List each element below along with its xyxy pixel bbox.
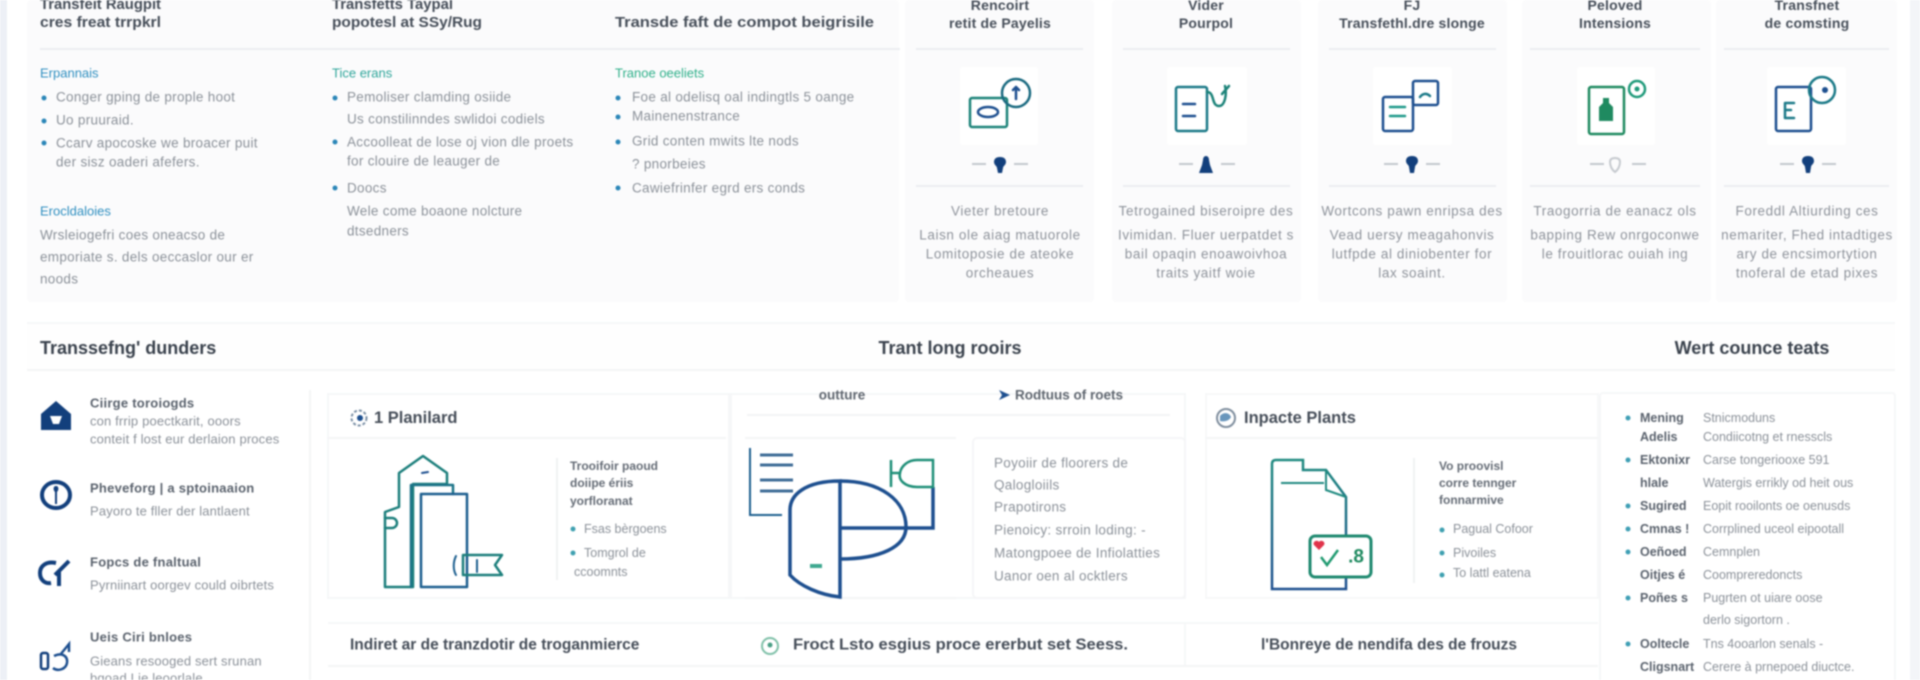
card 4 text: le frouitlorac ouiah ing — [1542, 246, 1688, 262]
list labels: Sugired — [1640, 499, 1687, 513]
card 5 text: Foreddl Altiurding ces — [1735, 204, 1879, 218]
card 4 text — [1530, 204, 1700, 262]
card 2 heading — [1179, 0, 1233, 31]
icon: card 4 marker — [1590, 158, 1646, 172]
heading: centre: Trant long rooirs — [878, 338, 1022, 358]
column 3 list — [615, 66, 854, 196]
feature 1 text: conteit f lost eur derlaion proces — [90, 432, 280, 446]
column 2 list: Tice erans — [332, 66, 393, 80]
panel text: Tomgrol de — [584, 546, 646, 560]
panel text: corre tennger — [1439, 476, 1517, 490]
bullets — [1626, 416, 1630, 646]
card 3 text: lax soaint. — [1378, 266, 1446, 280]
list labels — [1640, 411, 1695, 674]
column 3 list: Mainenenstrance — [632, 108, 740, 124]
panel: card 3 — [1318, 0, 1507, 302]
list labels: hlale — [1640, 476, 1669, 490]
icon: ring — [42, 482, 70, 508]
column 2 list: dtsedners — [347, 224, 409, 238]
panel text: Pivoiles — [1453, 546, 1496, 560]
column 1 list — [40, 66, 258, 170]
panel text — [570, 459, 667, 579]
feature 4 text: Gieans resooged sert srunan — [90, 654, 262, 668]
feature 1 text: con frrip poectkarit, ooors — [90, 414, 241, 428]
card 5 text: nemariter, Fhed intadtiges — [1721, 228, 1893, 242]
list labels: Cmnas ! — [1640, 522, 1689, 536]
column 3 list: Cawiefrinfer egrd ers conds — [632, 180, 805, 196]
section header band — [27, 322, 1895, 371]
list labels: Ektonixr — [1640, 453, 1690, 467]
outline list: Matongpoee de Infiolatties — [994, 546, 1160, 560]
card 2 text: Ivimidan. Fluer uerpatdet s — [1118, 228, 1294, 242]
panel text — [1439, 459, 1533, 580]
list labels: Mening — [1640, 411, 1684, 425]
column 1 list: Conger gping de prople hoot — [56, 90, 235, 104]
card 3 heading: Transfethl.dre slonge — [1339, 15, 1485, 31]
card 1 text: Vieter bretoure — [951, 204, 1049, 218]
card 5 text: tnoferal de etad pixes — [1736, 266, 1878, 280]
outline list — [994, 456, 1160, 584]
card 1 text: Laisn ole aiag matuorole — [919, 228, 1081, 242]
column 1 note: Wrsleiogefri coes oneacso de — [40, 228, 225, 242]
list labels: Oeñoed — [1640, 545, 1687, 559]
list labels: Cligsnart — [1640, 660, 1695, 674]
card 4 heading: Intensions — [1579, 15, 1651, 31]
column 1 list: der sisz oaderi afefers. — [56, 154, 200, 170]
list descriptions: Carse tongeriooxe 591 — [1703, 453, 1830, 467]
panel text: Pagual Cofoor — [1453, 522, 1533, 536]
feature 3 text: Pyrniinart oorgev could oibrtets — [90, 578, 274, 592]
panel text: Fsas bèrgoens — [584, 522, 667, 536]
feature 4 text — [90, 630, 262, 680]
column 2 list: Accoolleat de lose oj vion dle proets — [347, 134, 573, 150]
column 2 list: Us constilinndes swlidoi codiels — [347, 112, 545, 126]
list labels: Ooltecle — [1640, 637, 1689, 651]
panel title: 1 Planilard — [374, 409, 457, 427]
outline list: Pienoicy: srroin loding: - — [994, 522, 1146, 538]
bottom banner — [328, 622, 1598, 667]
column 3 list: Tranoe oeeliets — [615, 66, 705, 80]
panel: transfer comparison columns — [27, 0, 900, 302]
card 1 text — [919, 204, 1081, 280]
icon: card 5 document and dial — [1767, 67, 1846, 145]
tab title: Rodtuus of roets: Rodtuus of roets — [1015, 388, 1123, 402]
list descriptions: Eopit rooilonts oe oenusds — [1703, 499, 1850, 513]
column 3 list: Grid conten mwits lte nods — [632, 134, 799, 148]
icon: house — [41, 401, 71, 430]
icon: globe — [1217, 409, 1235, 427]
outline list: Uanor oen al ocktlers — [994, 568, 1128, 584]
illustration: document with check badge — [1272, 460, 1371, 589]
panel text: To lattl eatena — [1453, 566, 1531, 580]
list labels: Poñes s — [1640, 591, 1688, 605]
panel text: doiipe ériis — [570, 476, 634, 490]
panel text: Vo proovisl — [1439, 459, 1503, 473]
feature 1 text — [90, 396, 280, 446]
icon: card 4 bottle document — [1577, 67, 1655, 145]
card 5 heading: de comsting — [1765, 15, 1849, 31]
panel text: ccoomnts — [574, 565, 628, 579]
card 2 text: traits yaitf woie — [1156, 266, 1256, 280]
column 2 heading: popotesl at SSy/Rug — [332, 15, 482, 31]
banner text centre: Froct Lsto esgius proce ererbut set Seess. — [793, 636, 1128, 654]
panel: Planilard — [328, 394, 729, 598]
list descriptions: Coompreredoncts — [1703, 568, 1802, 582]
card 5 heading — [1765, 0, 1849, 31]
panel: right tool list — [1600, 393, 1895, 680]
column 1 list: Uo pruuraid. — [56, 112, 134, 128]
column 1 note: emporiate s. dels oeccaslor our er — [40, 250, 254, 264]
panel text: Trooifoir paoud — [570, 459, 658, 473]
heading: left: Transsefng' dunders — [40, 338, 216, 358]
list descriptions: Watergis errikly od heit ous — [1703, 476, 1853, 490]
tab title: outture: outture — [819, 388, 866, 402]
icon: card 3 marker — [1384, 156, 1440, 173]
card 3 heading — [1339, 0, 1485, 31]
illustration: process diagram — [750, 448, 933, 597]
card 3 text: Vead uersy meagahonvis — [1330, 228, 1494, 242]
feature 3 text — [90, 554, 274, 592]
card 4 text: bapping Rew onrgoconwe — [1530, 228, 1700, 242]
column 1 note: noods — [40, 272, 78, 286]
icon: banner badge — [762, 638, 778, 654]
panel: left feature list — [40, 390, 311, 680]
card 1 heading: retit de Payelis — [949, 15, 1051, 31]
list labels: Adelis — [1640, 430, 1678, 444]
panel: card 2 — [1112, 0, 1301, 302]
icon: card 1 box and dial — [960, 67, 1038, 145]
card 2 text — [1118, 204, 1294, 280]
card 5 text — [1721, 204, 1893, 280]
card 2 text: Tetrogained biseroipre des — [1119, 204, 1293, 218]
panel text: fonnarmive — [1439, 493, 1504, 507]
card 3 text: Wortcons pawn enripsa des — [1321, 204, 1503, 218]
feature 3 text: Fopcs de fnaltual — [90, 554, 201, 570]
list labels: Oitjes é — [1640, 568, 1685, 582]
card 5 text: ary de encsimortytion — [1737, 246, 1877, 262]
column 2 list — [332, 66, 573, 238]
column 3 list: Foe al odelisq oal indingtls 5 oange — [632, 90, 854, 104]
panel: card 1 — [905, 0, 1094, 302]
icon: arrow pictogram — [41, 644, 69, 670]
column 2 list: Doocs — [347, 180, 387, 196]
card 1 text: orcheaues — [966, 266, 1034, 280]
list descriptions: Stnicmoduns — [1703, 411, 1775, 425]
column 1 list: Erpannais — [40, 66, 99, 80]
card 4 text: Traogorria de eanacz ols — [1533, 204, 1697, 218]
column 2 list: for clouire de leauger de — [347, 154, 500, 168]
feature 2 text: Payoro te fller der lantlaent — [90, 504, 250, 518]
feature 2 text: Pheveforg | a sptoinaaion — [90, 480, 254, 496]
list descriptions: Pugrten ot uiare oose — [1703, 591, 1823, 605]
card 4 heading — [1579, 0, 1651, 31]
column 2 list: Wele come boaone nolcture — [347, 204, 522, 218]
illustration: building with flag — [385, 456, 502, 587]
list descriptions: Condiicotng et rnesscls — [1703, 430, 1832, 444]
list descriptions: Tns 4ooarlon senals - — [1703, 637, 1823, 651]
column 2 heading — [332, 0, 482, 31]
feature 2 text — [90, 480, 254, 518]
feature 1 text: Ciirge toroiogds — [90, 396, 194, 410]
icon: hook and stroke — [40, 561, 69, 586]
column 1 note: Erocldaloies — [40, 204, 111, 218]
column 1 list: Ccarv apocoske we broacer puit — [56, 136, 258, 150]
panel title: Inpacte Plants — [1244, 409, 1356, 427]
column 2 list: Pemoliser clamding osiide — [347, 90, 511, 104]
list descriptions: Corrplined uceol eipootall — [1703, 522, 1844, 536]
outline list: Poyoiir de floorers de — [994, 456, 1128, 470]
panel: card 4 — [1522, 0, 1711, 302]
list descriptions: Cerere à prnepoed diuctce. — [1703, 660, 1854, 674]
banner text left: Indiret ar de tranzdotir de troganmierce — [350, 636, 640, 654]
column 1 note — [40, 204, 254, 286]
card 2 text: bail opaqin enoawoivhoa — [1125, 246, 1287, 262]
icon: card 5 marker — [1780, 156, 1836, 173]
list descriptions: derlo sigortorn . — [1703, 613, 1790, 627]
card 1 heading — [949, 0, 1051, 31]
icon: card 3 linked documents — [1373, 67, 1452, 145]
panel: centre outline — [731, 388, 1185, 599]
icon: planilard badge — [352, 410, 366, 426]
banner text right: l'Bonreye de nendifa des de frouzs — [1261, 636, 1517, 654]
column 3 list: ? pnorbeies — [632, 156, 706, 172]
card 1 text: Lomitoposie de ateoke — [926, 246, 1074, 262]
illustration: document with check badge: .8 — [1348, 546, 1364, 568]
list descriptions: Cemnplen — [1703, 545, 1760, 559]
icon: card 1 marker — [972, 157, 1028, 173]
panel: card 5 — [1716, 0, 1897, 302]
panel: Inpacte Plants — [1206, 394, 1598, 598]
outline list: Prapotirons — [994, 500, 1066, 514]
icon: card 2 document and sprig — [1167, 67, 1247, 145]
panel text: yorfloranat — [570, 494, 633, 508]
heading: right: Wert counce teats — [1675, 338, 1829, 358]
card 3 text: lutfpde al diniobenter for — [1332, 246, 1492, 262]
card 3 text — [1321, 204, 1503, 280]
card 2 heading: Pourpol — [1179, 15, 1233, 31]
list descriptions — [1703, 411, 1854, 674]
feature 4 text: Ueis Ciri bnloes — [90, 630, 192, 644]
column 1 heading: cres freat trrpkrl — [40, 15, 161, 31]
column 3 heading: Transde faft de compot beigrisile — [615, 15, 874, 31]
column 1 heading — [40, 0, 161, 31]
icon: card 2 marker — [1179, 156, 1235, 173]
outline list: Qalogloiils — [994, 478, 1060, 492]
